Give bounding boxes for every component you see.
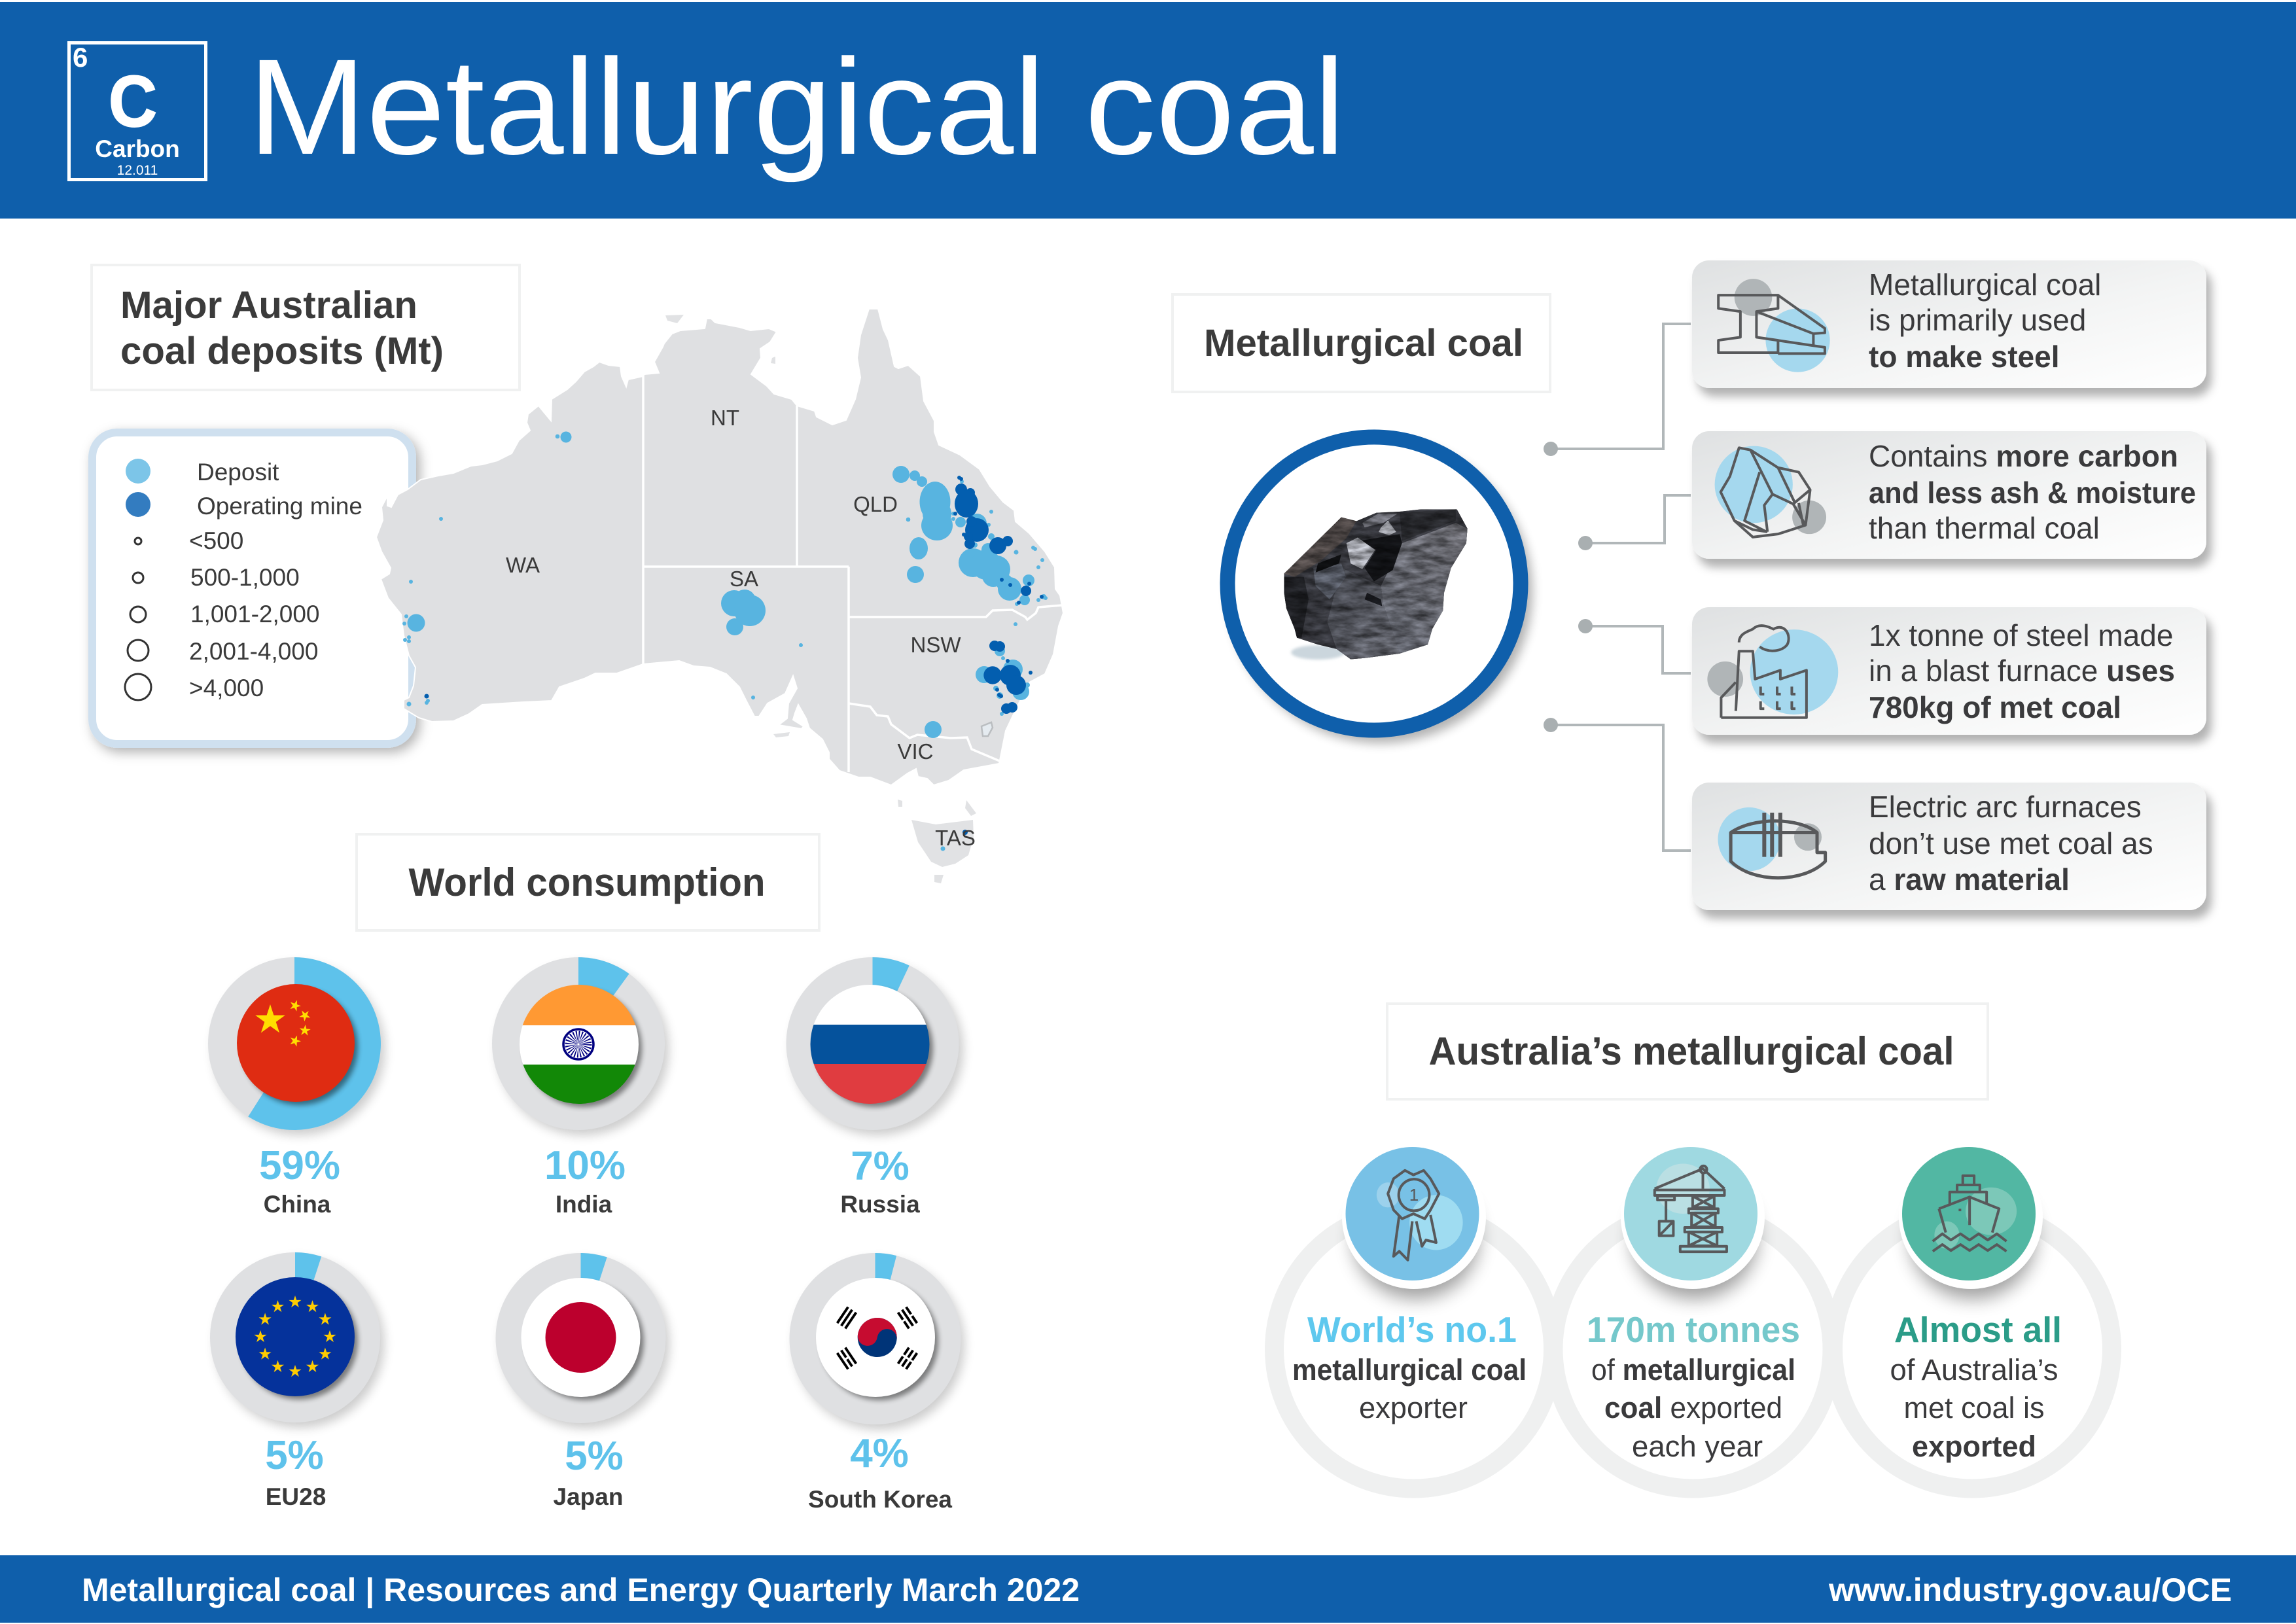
- state labels: NT: [711, 406, 739, 430]
- icon: steel beam: [1718, 279, 1830, 372]
- label: EU28: 5%: [265, 1433, 324, 1478]
- text: don’t use met coal as: [1869, 826, 2153, 860]
- operating mines: [424, 476, 1044, 835]
- icon: port crane: [1655, 1163, 1727, 1252]
- label: China: China: [264, 1191, 331, 1218]
- stat: world number one: World’s no.1: [1307, 1309, 1517, 1350]
- state labels: SA: [730, 567, 758, 591]
- label: Russia: 7%: [851, 1144, 910, 1189]
- periodic table tile: carbon: Carbon: [95, 135, 180, 162]
- state labels: TAS: [935, 826, 976, 850]
- flag: India: [517, 981, 641, 1108]
- label: South Korea: [808, 1431, 952, 1513]
- flag: South Korea: [816, 1278, 935, 1397]
- badge: ship: [1899, 1145, 2043, 1299]
- label: China: [259, 1143, 340, 1218]
- text: Electric arc furnaces: [1869, 790, 2142, 824]
- card: make steel: [1692, 260, 2206, 388]
- text: to make steel: [1869, 340, 2059, 374]
- legend: size classes: [125, 527, 320, 701]
- heading: world consumption: [357, 834, 819, 930]
- legend: deposit: [126, 459, 279, 485]
- card: more carbon: [1692, 431, 2206, 559]
- stat: almost all: of Australia’s: [1890, 1353, 2058, 1386]
- legend: operating mine: [126, 492, 362, 520]
- Tasmania and islands: [665, 315, 976, 883]
- flag: China: [237, 984, 355, 1102]
- donut: Japan 5%: [496, 1253, 669, 1428]
- legend: size classes: >4,000: [189, 675, 264, 701]
- state labels: QLD: [853, 492, 898, 516]
- badge: world number one: 1: [1409, 1185, 1419, 1205]
- state labels: WA: [506, 553, 540, 577]
- card: blast furnace: [1692, 607, 2206, 735]
- icon: coal lump outline: [1715, 446, 1826, 537]
- text: a raw material: [1869, 862, 2070, 896]
- card: electric arc furnace: [1692, 783, 2206, 910]
- badge: crane: [1621, 1145, 1765, 1299]
- coal lump: [1284, 509, 1468, 660]
- stat: world number one: exporter: [1359, 1391, 1468, 1424]
- coal photo in ring: [1227, 437, 1532, 743]
- footer banner: [0, 1555, 2296, 1623]
- text: 1x tonne of steel made: [1869, 618, 2173, 652]
- text: Contains more carbon: [1869, 439, 2178, 473]
- label: India: India: [556, 1191, 612, 1218]
- donut: Russia 7%: [786, 957, 963, 1135]
- title: Metallurgical coal: [248, 31, 1345, 183]
- footer banner: www.industry.gov.au/OCE: [1828, 1572, 2232, 1608]
- label: Japan: Japan: [554, 1483, 623, 1510]
- donut: China 59%: [208, 957, 385, 1135]
- heading: metallurgical coal: [1173, 294, 1550, 392]
- legend: size classes: 1,001-2,000: [190, 601, 320, 627]
- text: 780kg of met coal: [1869, 690, 2121, 724]
- header banner: [0, 2, 2296, 219]
- label: China: 59%: [259, 1143, 340, 1188]
- text: Metallurgical coal: [1869, 268, 2101, 302]
- heading: world consumption: World consumption: [408, 860, 766, 904]
- icon: ribbon: [1377, 1171, 1463, 1260]
- text: in a blast furnace uses: [1869, 654, 2175, 688]
- donut: EU28 5%: [210, 1252, 384, 1428]
- connector lines: [1544, 324, 1691, 851]
- legend: deposit: Deposit: [197, 459, 279, 485]
- label: India: 10%: [544, 1143, 626, 1188]
- stat: world number one: [1292, 1309, 1527, 1424]
- stat: world number one: metallurgical coal: [1292, 1353, 1527, 1386]
- label: South Korea: South Korea: [808, 1486, 952, 1513]
- periodic table tile: carbon: [69, 42, 205, 179]
- heading: major deposits: coal deposits (Mt): [120, 330, 444, 372]
- flag: EU: [236, 1277, 355, 1396]
- legend: [92, 432, 412, 744]
- text: [1869, 439, 2196, 545]
- state labels: NSW: [911, 633, 961, 657]
- deposits: [402, 432, 1048, 851]
- map of Australia with coal deposits: [376, 309, 1063, 883]
- heading: major deposits: [92, 265, 520, 390]
- stat: almost all: exported: [1912, 1430, 2036, 1463]
- stat: 170m tonnes: 170m tonnes: [1587, 1309, 1800, 1350]
- icon: factory: [1707, 626, 1838, 718]
- badge: world number one: [1342, 1145, 1486, 1299]
- donut: India 10%: [492, 957, 669, 1135]
- icon: arc furnace: [1718, 807, 1826, 878]
- legend: size classes: 2,001-4,000: [189, 638, 319, 665]
- stat: 170m tonnes: of metallurgical: [1591, 1353, 1795, 1386]
- flag: Japan: [521, 1278, 640, 1397]
- label: Russia: Russia: [840, 1191, 920, 1218]
- icon: ship: [1933, 1176, 2017, 1251]
- periodic table tile: carbon: 6: [73, 42, 88, 73]
- label: Japan: [554, 1434, 624, 1510]
- footer banner: Metallurgical coal | Resources and Energy Quarterly March 2022: [82, 1572, 1080, 1609]
- stat: almost all: Almost all: [1894, 1309, 2062, 1350]
- stat rings: [1275, 1210, 2112, 1489]
- periodic table tile: carbon: C: [109, 62, 157, 142]
- state labels: [506, 406, 976, 850]
- stat: 170m tonnes: coal exported: [1604, 1391, 1782, 1424]
- stat: almost all: met coal is: [1904, 1391, 2044, 1424]
- legend: size classes: 500-1,000: [190, 564, 300, 591]
- flag: Russia: [808, 981, 932, 1107]
- text: [1869, 268, 2101, 374]
- legend: size classes: <500: [189, 527, 243, 554]
- stat: almost all: [1890, 1309, 2062, 1463]
- state labels: VIC: [897, 739, 934, 764]
- heading: metallurgical coal: Metallurgical coal: [1204, 322, 1523, 364]
- label: EU28: [265, 1433, 326, 1510]
- stat: 170m tonnes: each year: [1632, 1430, 1763, 1463]
- heading: major deposits: Major Australian: [120, 284, 417, 327]
- legend: operating mine: Operating mine: [197, 493, 362, 520]
- label: South Korea: 4%: [850, 1431, 909, 1476]
- label: Japan: 5%: [565, 1434, 624, 1479]
- label: India: [544, 1143, 626, 1218]
- heading: Australia's metallurgical coal: [1387, 1004, 1988, 1099]
- periodic table tile: carbon: 12.011: [117, 163, 158, 178]
- donut: South Korea 4%: [789, 1253, 964, 1430]
- heading: Australia's metallurgical coal: Australia’s metallurgical coal: [1429, 1029, 1954, 1073]
- text: is primarily used: [1869, 303, 2086, 337]
- text: and less ash & moisture: [1869, 476, 2196, 510]
- text: [1869, 790, 2153, 896]
- label: EU28: EU28: [266, 1483, 326, 1510]
- text: [1869, 618, 2175, 724]
- text: than thermal coal: [1869, 511, 2100, 545]
- label: Russia: [840, 1144, 920, 1218]
- stat: 170m tonnes: [1587, 1309, 1800, 1463]
- mainland: [376, 309, 1063, 785]
